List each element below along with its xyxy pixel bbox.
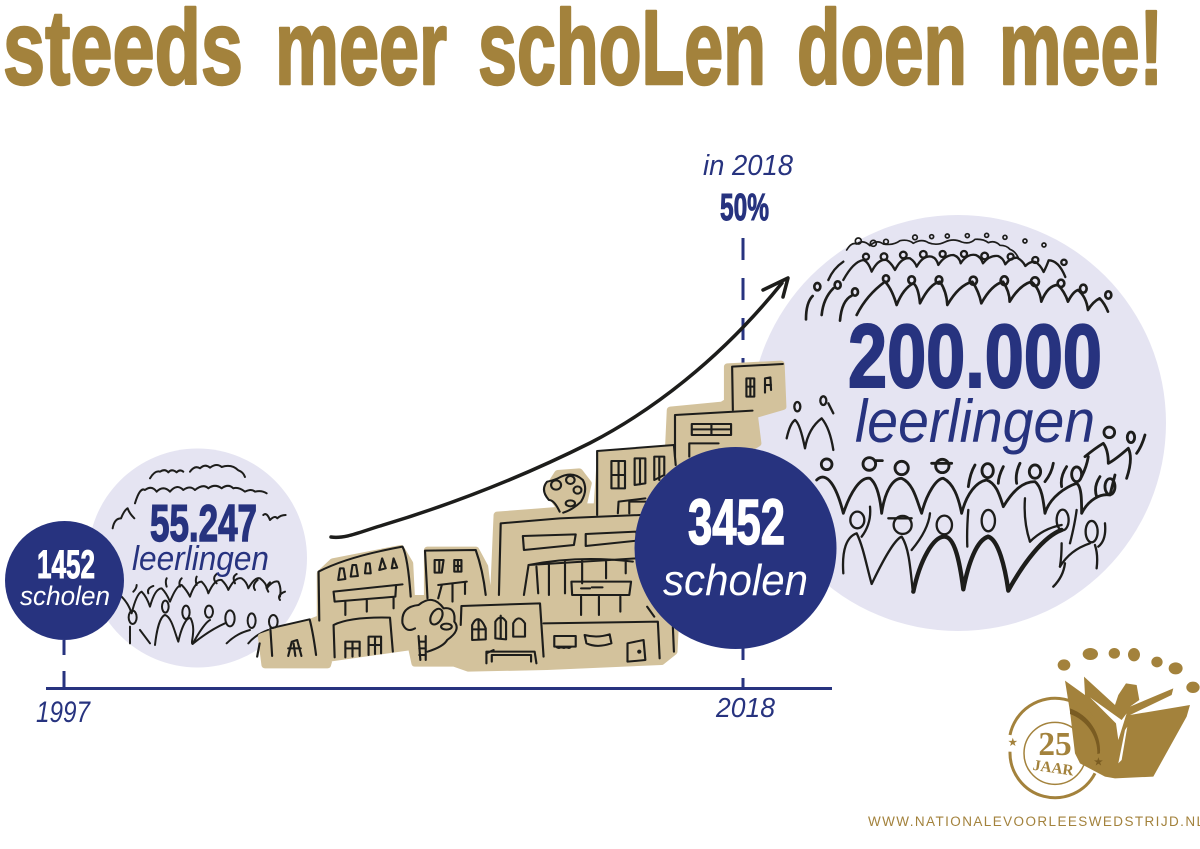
axis label: 1997: 1997 xyxy=(36,696,91,729)
logo: 25 jaar book: 25 xyxy=(1038,726,1072,763)
callout: in 2018 50%: in 2018 xyxy=(703,150,793,182)
crowd: 1997 students xyxy=(113,465,286,645)
label: leerlingen: leerlingen xyxy=(132,540,269,578)
panel: 3452 schools circle xyxy=(634,447,836,649)
label: scholen: scholen xyxy=(663,556,808,605)
label: leerlingen: leerlingen xyxy=(855,388,1095,455)
arrow: growth curve xyxy=(331,278,788,537)
panel: 2018 students circle xyxy=(750,215,1166,631)
title xyxy=(3,0,1163,107)
callout: in 2018 50%: 50% xyxy=(720,187,769,229)
number: 55.247: 55.247 xyxy=(150,495,257,553)
panel: 1997 students circle xyxy=(88,448,307,668)
label: scholen: scholen xyxy=(20,581,110,611)
callout: in 2018 50% xyxy=(703,150,793,229)
axis label: 2018: 2018 xyxy=(715,692,775,723)
logo: 25 jaar book xyxy=(1008,648,1200,798)
chart axis: timeline 1997-2018 xyxy=(46,238,832,688)
logo: 25 jaar book: ★ xyxy=(1093,756,1103,768)
number: 1452: 1452 xyxy=(37,543,95,587)
illustration: school buildings xyxy=(257,364,783,668)
number: 3452: 3452 xyxy=(688,486,785,558)
logo: 25 jaar book: JAAR xyxy=(1032,757,1076,780)
footer: website URL: WWW.NATIONALEVOORLEESWEDSTRIJD.NL xyxy=(868,814,1200,829)
crowd: 2018 students xyxy=(787,233,1145,592)
panel: 1452 schools circle xyxy=(5,521,124,640)
big number: 200.000: 200.000 xyxy=(848,307,1102,407)
logo: 25 jaar book: ★ xyxy=(1008,737,1018,749)
